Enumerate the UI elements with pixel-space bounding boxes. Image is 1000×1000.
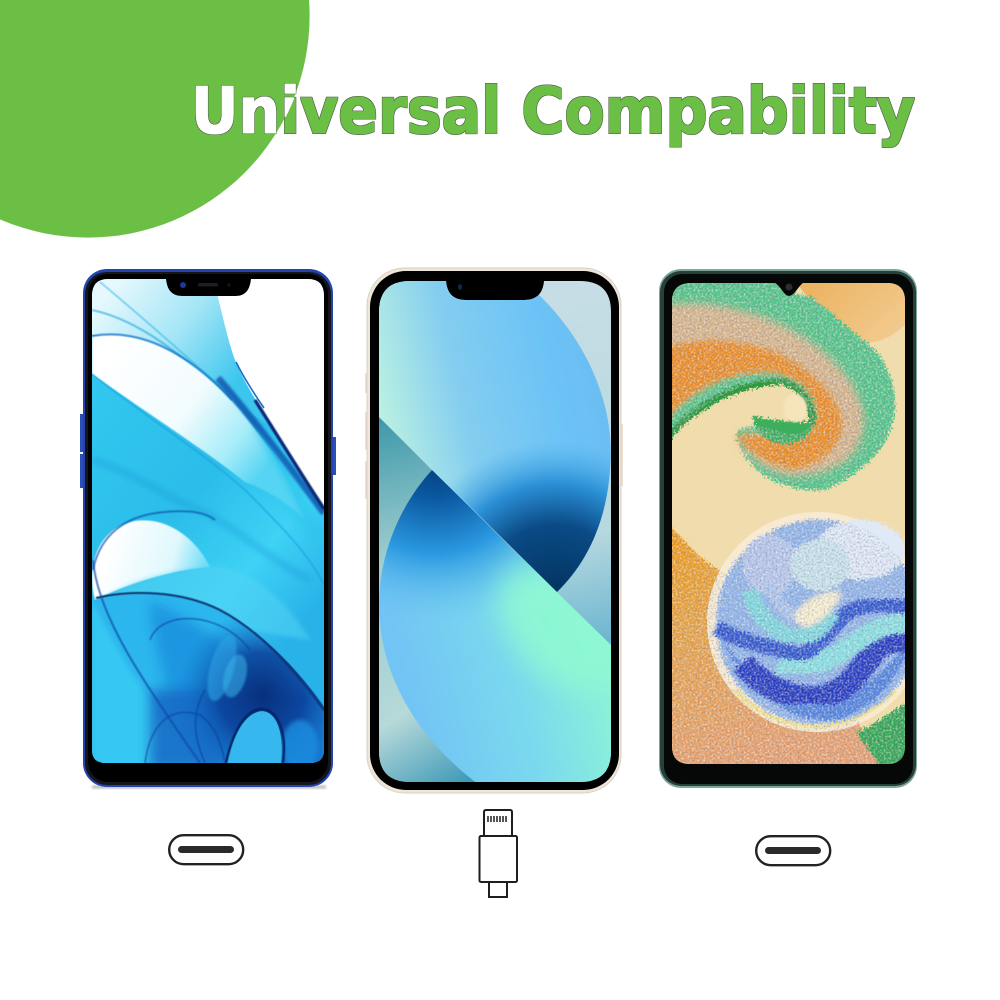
wallpaper: blue swirl [92, 279, 324, 763]
orange sand lower left [672, 528, 880, 764]
notch: camera and speaker [180, 282, 231, 288]
sand swirl [660, 280, 895, 490]
planet upper blue band [717, 605, 912, 655]
pale top veil [90, 275, 275, 430]
swirl hole [783, 394, 807, 422]
phone body [659, 269, 917, 788]
wallpaper: blue and mint folds [379, 281, 611, 782]
upper fold [375, 278, 611, 592]
phone body [83, 269, 333, 787]
dark wedge [451, 449, 610, 592]
lower fold [379, 470, 615, 790]
white lens [92, 335, 305, 520]
wallpaper: sand swirl and planet [672, 283, 905, 764]
front camera [458, 284, 462, 290]
white upper right [218, 279, 324, 510]
mint glow [490, 560, 604, 688]
title: Universal Compability [191, 75, 915, 149]
side buttons [80, 414, 336, 488]
icon: USB-C port left [169, 835, 243, 864]
swirl tan band [660, 303, 864, 476]
cyan band right [252, 428, 306, 520]
planet inner cyan arc [750, 590, 832, 638]
small cyan oval [227, 711, 282, 763]
peach blob [800, 283, 905, 342]
swirl green centre [752, 416, 811, 444]
dark right ribbon [218, 378, 324, 513]
lower white blob [92, 520, 210, 600]
front camera [786, 284, 792, 290]
planet dark blue band [743, 640, 912, 698]
sand texture [668, 280, 908, 768]
swirl base green [660, 280, 895, 490]
planet cyan band [777, 620, 912, 668]
lower blue area [92, 594, 324, 763]
swirl dark green inner edge [665, 381, 812, 440]
phone: green Samsung handset [659, 269, 927, 788]
green corner [854, 702, 905, 764]
lower left triangle [379, 417, 432, 594]
planet sand [716, 520, 920, 724]
green corner circle [0, 0, 310, 238]
swirl orange band [660, 341, 842, 469]
lower bottom left [379, 646, 475, 782]
phone body [367, 268, 621, 793]
lower fold dark top [380, 470, 604, 688]
icon: USB-C port right [756, 836, 830, 865]
dark swirl rings [145, 619, 250, 763]
planet rim [707, 512, 927, 732]
floor shadow [92, 785, 326, 789]
side buttons [365, 373, 623, 499]
phone: starlight iPhone [365, 268, 623, 794]
phone: blue Android handset [80, 269, 347, 789]
planet pale core [793, 591, 842, 628]
icon: Lightning connector [480, 810, 517, 897]
